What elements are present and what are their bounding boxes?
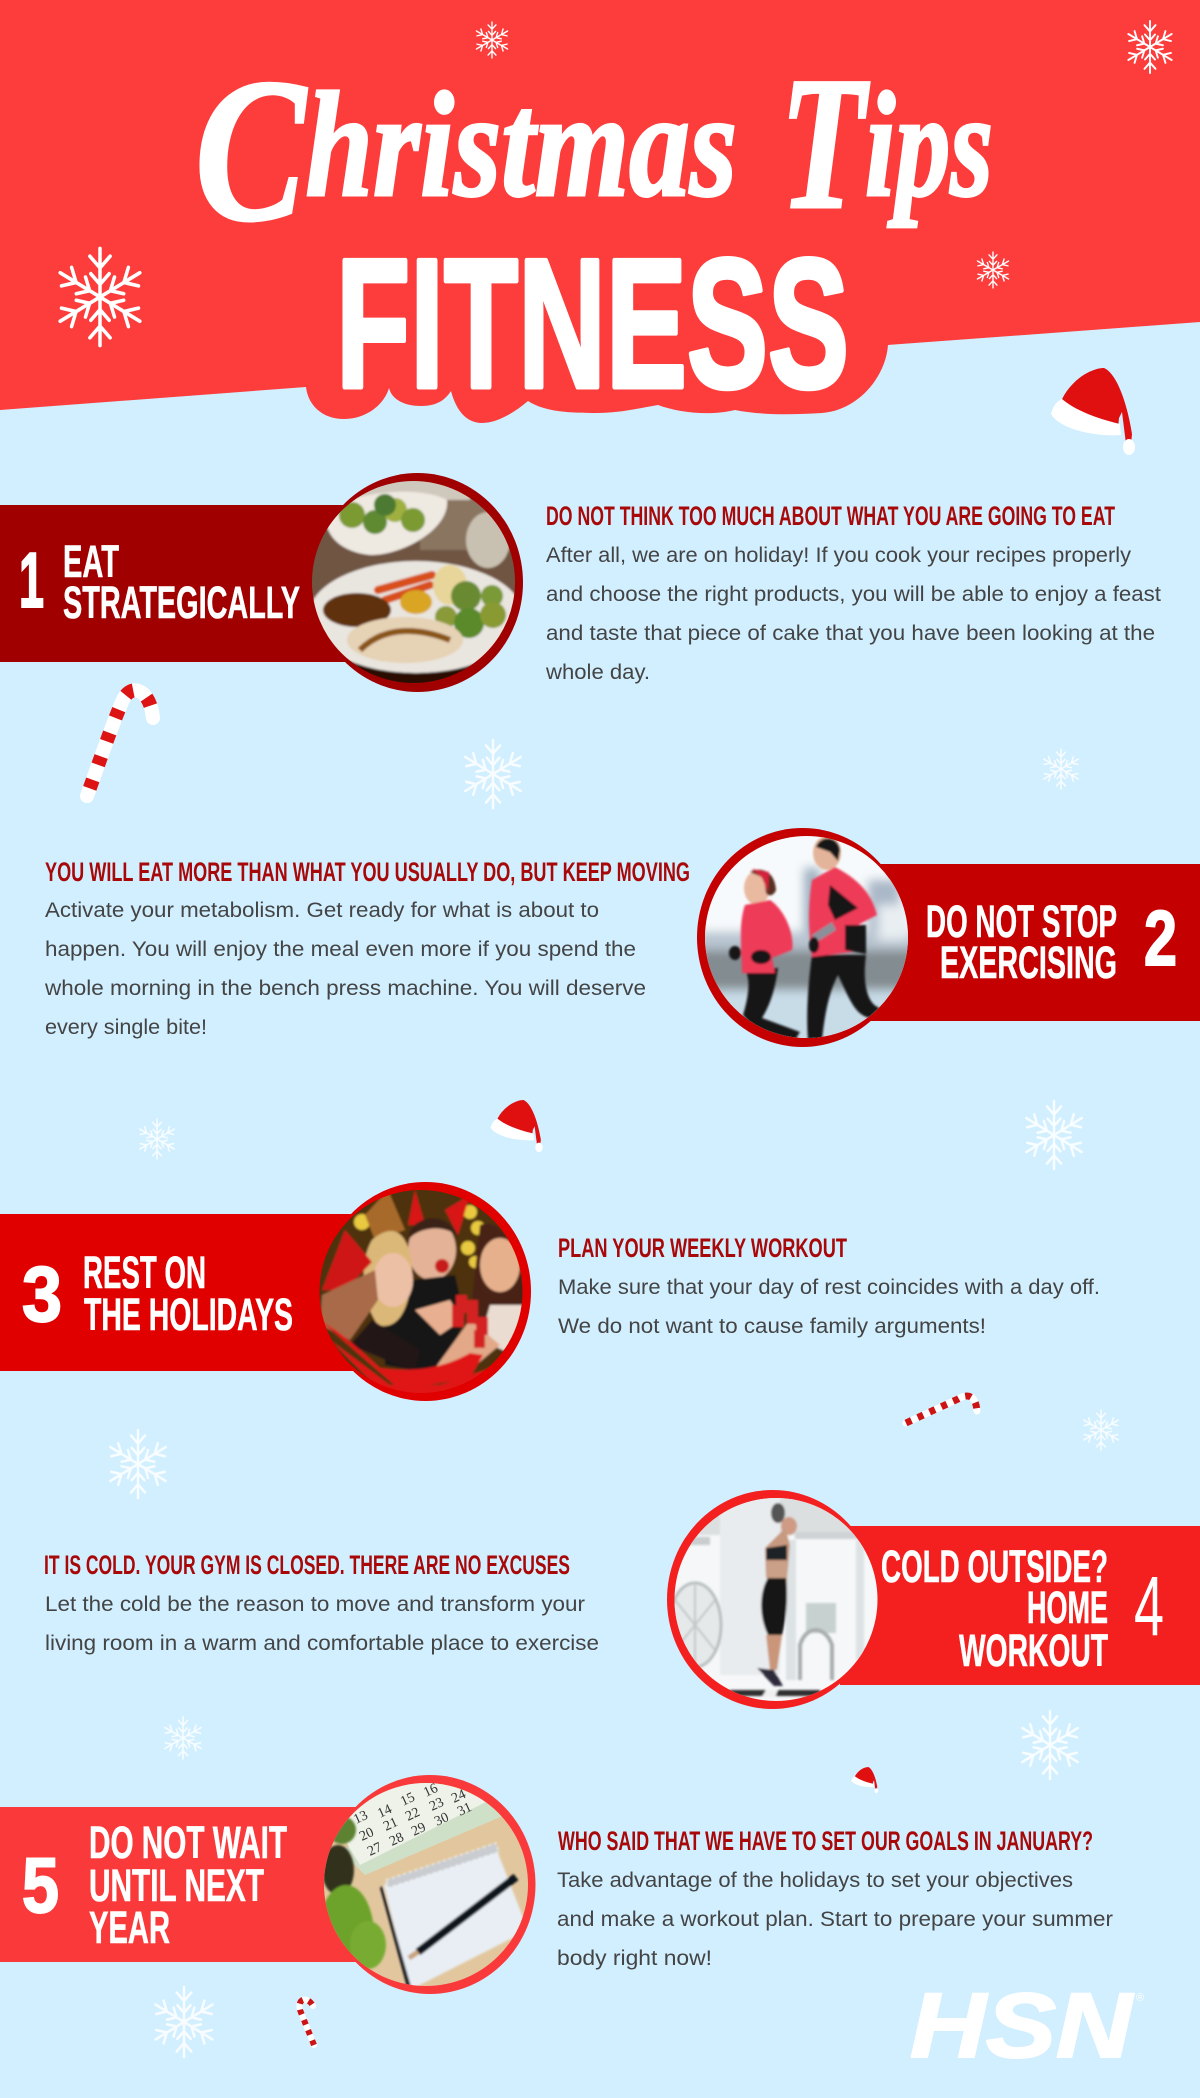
- photo 5: calendar and notebook: 27: [365, 1840, 384, 1860]
- heading 2: YOU WILL EAT MORE THAN WHAT YOU USUALLY DO, BUT KEEP MOVING: [45, 857, 690, 887]
- band 1: [0, 505, 345, 662]
- photo 5: calendar and notebook: 29: [409, 1820, 428, 1840]
- band 4 title: HOME: [1027, 1582, 1108, 1633]
- photo 3: friends toasting: [320, 1182, 531, 1401]
- heading 3: PLAN YOUR WEEKLY WORKOUT: [558, 1233, 847, 1263]
- heading 4: IT IS COLD. YOUR GYM IS CLOSED. THERE ARE NO EXCUSES: [44, 1550, 570, 1580]
- photo 5: calendar and notebook: 30: [432, 1810, 451, 1830]
- number 5: 5: [22, 1841, 59, 1929]
- icon: candy cane medium: [906, 1396, 977, 1423]
- number 2: 2: [1144, 894, 1177, 982]
- photo 5: calendar and notebook: 31: [455, 1800, 474, 1820]
- snowflakes row 4: [163, 1711, 1081, 1779]
- body 4: living room in a warm and comfortable place to exercise: [45, 1632, 599, 1655]
- photo 5: calendar and notebook: 23: [427, 1795, 446, 1815]
- band 5 title: YEAR: [89, 1902, 170, 1953]
- body 3: Make sure that your day of rest coincides with a day off.: [558, 1276, 1100, 1299]
- snowflake icons in header: [55, 21, 1174, 346]
- band 5 title: UNTIL NEXT: [89, 1860, 264, 1911]
- photo 2: runners: [697, 828, 908, 1047]
- panel 4: cold outside: [660, 1485, 1200, 1715]
- band 5 title: [89, 1817, 287, 1953]
- photo 5: calendar and notebook: 13: [351, 1808, 370, 1828]
- panel 1: eat strategically: [0, 470, 530, 700]
- band 5 title: DO NOT WAIT: [89, 1817, 287, 1868]
- photo 5: calendar and notebook: [318, 1775, 540, 1995]
- title: Christmas Tips: C: [195, 37, 307, 264]
- photo 5: calendar and notebook: 22: [403, 1805, 422, 1825]
- body 5: and make a workout plan. Start to prepare your summer: [557, 1908, 1113, 1931]
- icon: santa hat large: [1051, 368, 1135, 455]
- band 3 title: [83, 1247, 293, 1340]
- body 1: and taste that piece of cake that you have been looking at the: [546, 622, 1155, 645]
- band 4: [840, 1526, 1200, 1685]
- title: Christmas Tips: ips: [865, 62, 993, 228]
- panel 3: rest on the holidays: [0, 1175, 535, 1410]
- photo 5: calendar and notebook: 21: [381, 1815, 400, 1835]
- body 2: happen. You will enjoy the meal even more if you spend the: [45, 938, 636, 961]
- body 2: whole morning in the bench press machine. You will deserve: [44, 977, 646, 1000]
- title: FITNESS: FITNESS: [336, 220, 849, 426]
- band 1 title: [63, 536, 300, 628]
- title: Christmas Tips: hristmas: [306, 62, 737, 228]
- snowflakes row 2: [137, 1101, 1085, 1169]
- body 2: Activate your metabolism. Get ready for what is about to: [45, 899, 599, 922]
- photo 4: woman jumping: [667, 1490, 878, 1709]
- icon: candy cane large: [87, 690, 153, 796]
- body 5: [557, 1869, 1113, 1970]
- body 2: every single bite!: [45, 1016, 207, 1039]
- panel 3 text: [558, 1233, 1100, 1338]
- body 1: [545, 544, 1161, 684]
- photo 5: calendar and notebook: 14: [375, 1802, 394, 1822]
- photo 5: calendar and notebook: 15: [398, 1790, 417, 1810]
- photo 5: calendar and notebook: 28: [387, 1830, 406, 1850]
- number 1: 1: [19, 536, 44, 624]
- body 4: [45, 1593, 599, 1655]
- panel 2: do not stop exercising: [697, 828, 1200, 1047]
- photo 5: calendar and notebook: 20: [357, 1825, 376, 1845]
- panel 2 text: [44, 857, 690, 1039]
- band 4 title: WORKOUT: [959, 1625, 1108, 1676]
- header banner: [0, 0, 1200, 423]
- band 5: [0, 1807, 360, 1962]
- body 4: Let the cold be the reason to move and transform your: [45, 1593, 585, 1616]
- title: Christmas Tips: T: [780, 39, 870, 249]
- photo 5: calendar and notebook: 16: [421, 1781, 440, 1801]
- photo 1: christmas dinner: [312, 473, 523, 692]
- band 3: [0, 1214, 355, 1371]
- band 4 title: [881, 1541, 1108, 1676]
- band 2 title: [926, 896, 1117, 988]
- body 5: body right now!: [557, 1947, 712, 1970]
- body 3: We do not want to cause family arguments!: [558, 1315, 986, 1338]
- band 1 title: EAT: [63, 536, 119, 587]
- body 1: After all, we are on holiday! If you cook your recipes properly: [546, 544, 1132, 567]
- panel 5: do not wait: [0, 1775, 540, 1995]
- snowflakes row 3: [107, 1410, 1121, 1498]
- band 2: [860, 864, 1200, 1021]
- icon: santa hat medium: [491, 1100, 543, 1152]
- snowflakes row 1: [462, 740, 1081, 808]
- band 1 title: STRATEGICALLY: [63, 577, 300, 628]
- body 1: and choose the right products, you will be able to enjoy a feast: [546, 583, 1161, 606]
- panel 4 text: [44, 1550, 599, 1655]
- number 4: 4: [1134, 1559, 1164, 1653]
- snowflake bottom: [152, 1987, 216, 2057]
- body 2: [44, 899, 646, 1039]
- band 3 title: REST ON: [83, 1247, 206, 1298]
- photo 5: calendar and notebook: 24: [449, 1787, 468, 1807]
- icon: santa hat small: [851, 1767, 878, 1793]
- body 5: Take advantage of the holidays to set your objectives: [557, 1869, 1073, 1892]
- body 1: whole day.: [545, 661, 650, 684]
- logo: HSN: HSN: [910, 1975, 1135, 2077]
- panel 5 text: [557, 1826, 1113, 1970]
- icon: candy cane small: [299, 2000, 314, 2045]
- body 3: [558, 1276, 1100, 1338]
- title: Christmas Tips: [195, 37, 993, 264]
- logo: HSN: ®: [1136, 1992, 1144, 2004]
- band 3 title: THE HOLIDAYS: [84, 1289, 293, 1340]
- panel 1 text: [545, 501, 1161, 684]
- number 3: 3: [22, 1250, 62, 1338]
